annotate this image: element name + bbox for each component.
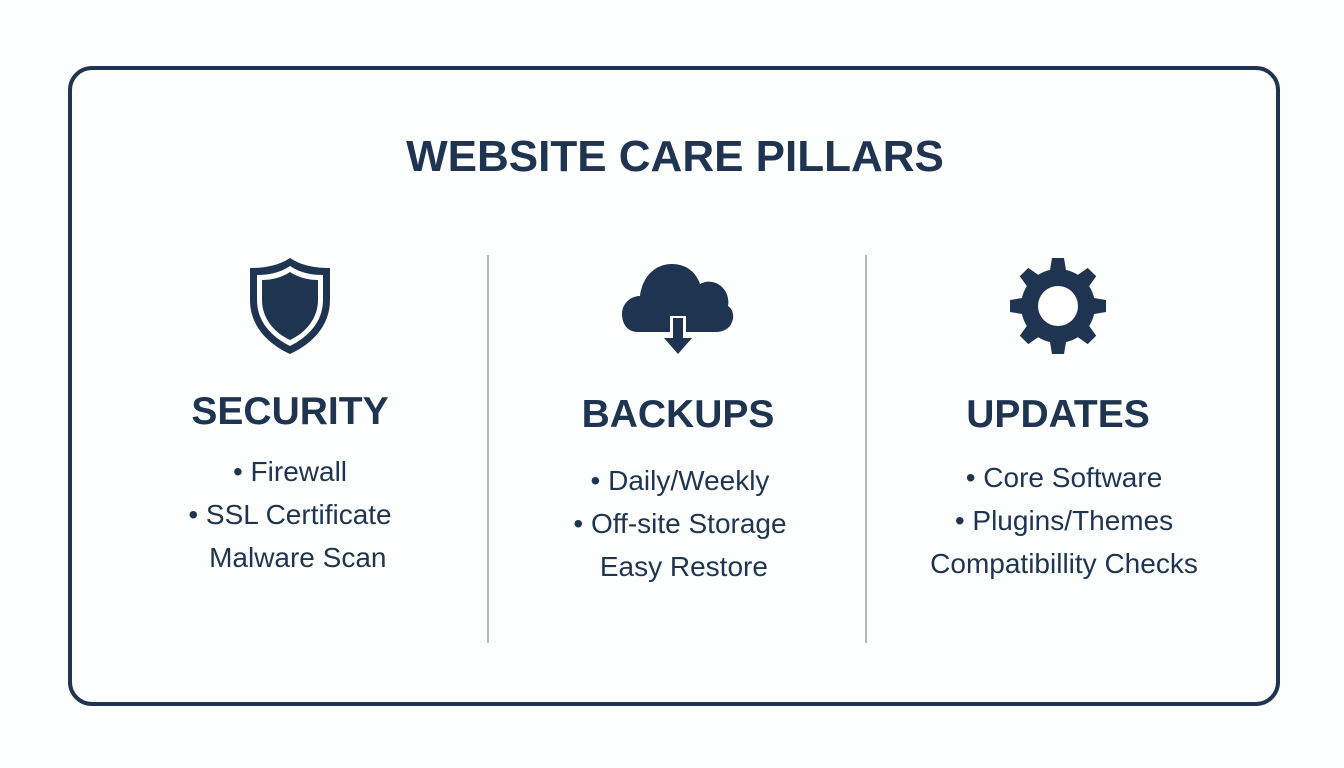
list: security: • SSL Certificate	[188, 499, 392, 530]
list: security: • Firewall	[233, 456, 347, 487]
list: updates	[930, 462, 1198, 579]
list: backups: • Daily/Weekly	[591, 465, 769, 496]
list: security	[188, 456, 392, 573]
list: backups: • Off-site Storage	[573, 508, 787, 539]
list: security: Malware Scan	[209, 542, 386, 573]
frame	[68, 66, 1280, 706]
list: updates: Compatibillity Checks	[930, 548, 1198, 579]
list: backups: Easy Restore	[600, 551, 768, 582]
icon: cloud download	[622, 264, 734, 354]
list: backups	[573, 465, 787, 582]
heading: updates: UPDATES	[966, 393, 1150, 436]
title: WEBSITE CARE PILLARS	[406, 132, 944, 181]
heading: security: SECURITY	[191, 390, 389, 433]
list: updates: • Core Software	[966, 462, 1162, 493]
icon: shield	[250, 258, 330, 354]
heading: backups: BACKUPS	[582, 393, 774, 436]
icon: gear	[1010, 258, 1106, 354]
list: updates: • Plugins/Themes	[955, 505, 1173, 536]
